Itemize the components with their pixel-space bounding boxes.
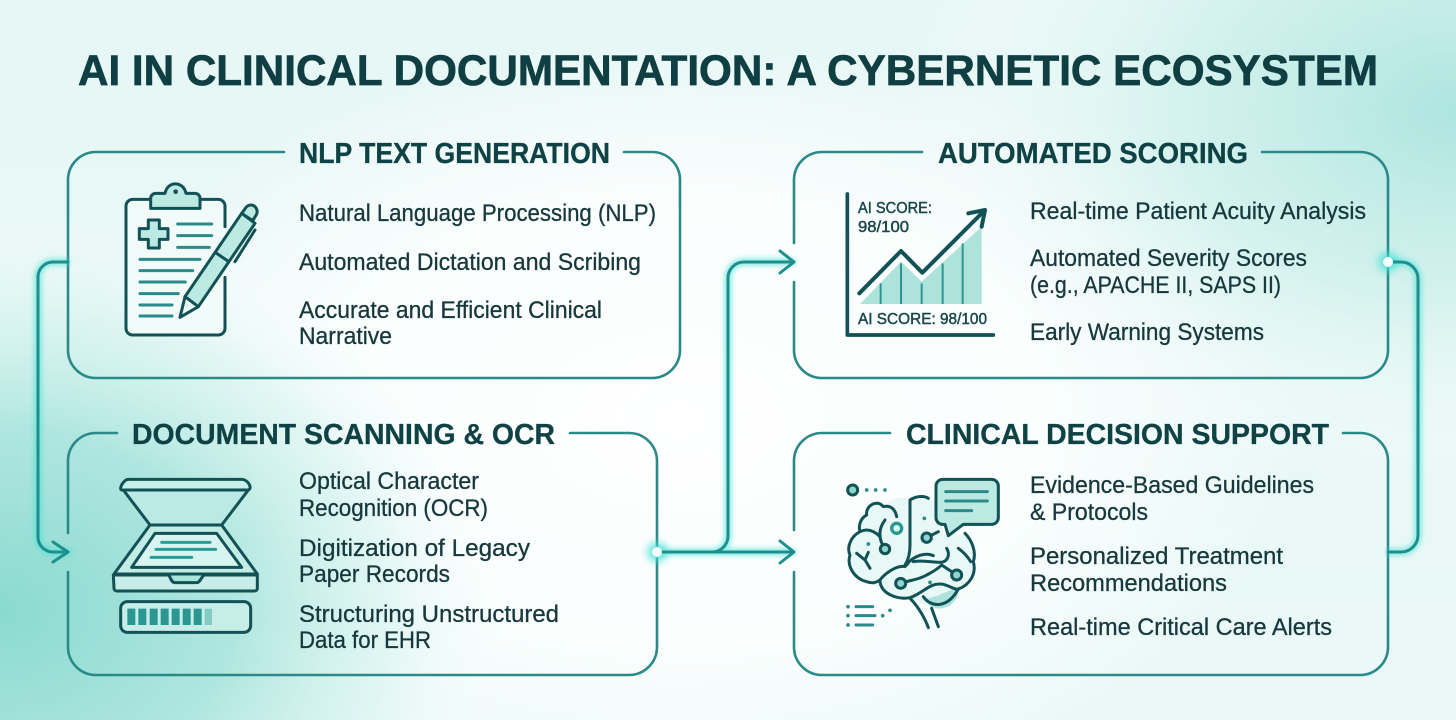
panel border xyxy=(794,152,1388,378)
list: Paper Records xyxy=(299,561,450,588)
icon: score chart xyxy=(847,194,993,335)
list: Structuring Unstructured xyxy=(299,601,559,628)
list: Automated Dictation and Scribing xyxy=(299,249,641,276)
icon: score chart: AI SCORE: 98/100 xyxy=(858,311,987,328)
arrow: panel one to panel two xyxy=(38,262,68,562)
panel: automated scoring xyxy=(794,138,1388,378)
heading: AUTOMATED SCORING xyxy=(938,138,1248,170)
list xyxy=(299,468,559,654)
panel: clinical decision support xyxy=(794,419,1388,675)
icon: score chart: AI SCORE: xyxy=(858,200,932,217)
list: Data for EHR xyxy=(299,627,431,654)
list xyxy=(1030,198,1366,346)
list: Recommendations xyxy=(1030,570,1227,597)
list: (e.g., APACHE II, SAPS II) xyxy=(1030,272,1281,299)
list: & Protocols xyxy=(1030,499,1148,526)
title: AI IN CLINICAL DOCUMENTATION: A CYBERNETIC ECOSYSTEM xyxy=(78,47,1378,95)
panel: NLP text generation xyxy=(68,138,680,378)
panel border xyxy=(68,433,657,675)
list: Early Warning Systems xyxy=(1030,319,1264,346)
list: Natural Language Processing (NLP) xyxy=(299,200,656,227)
list: Real-time Critical Care Alerts xyxy=(1030,614,1332,641)
list: Optical Character xyxy=(299,468,479,495)
list: Recognition (OCR) xyxy=(299,495,488,522)
heading: CLINICAL DECISION SUPPORT xyxy=(906,419,1329,451)
arrow: scoring to decision support xyxy=(1378,252,1418,552)
list: Accurate and Efficient Clinical xyxy=(299,297,602,324)
heading: NLP TEXT GENERATION xyxy=(299,138,610,170)
icon: clipboard and pen xyxy=(126,184,257,335)
panel border xyxy=(68,152,680,378)
list: Digitization of Legacy xyxy=(299,535,530,562)
list: Automated Severity Scores xyxy=(1030,245,1307,272)
list: Narrative xyxy=(299,323,392,350)
list: Personalized Treatment xyxy=(1030,543,1283,570)
list xyxy=(1030,472,1332,641)
icon: score chart: 98/100 xyxy=(858,219,909,236)
arrow: scanning to scoring and decision support xyxy=(647,251,794,563)
icon: brain with speech bubble xyxy=(848,479,998,628)
list: Evidence-Based Guidelines xyxy=(1030,472,1314,499)
list xyxy=(299,200,656,350)
icon: flatbed scanner xyxy=(113,479,257,632)
heading: DOCUMENT SCANNING & OCR xyxy=(132,419,555,451)
list: Real-time Patient Acuity Analysis xyxy=(1030,198,1366,225)
panel border xyxy=(794,433,1388,675)
panel: document scanning and OCR xyxy=(68,419,657,675)
